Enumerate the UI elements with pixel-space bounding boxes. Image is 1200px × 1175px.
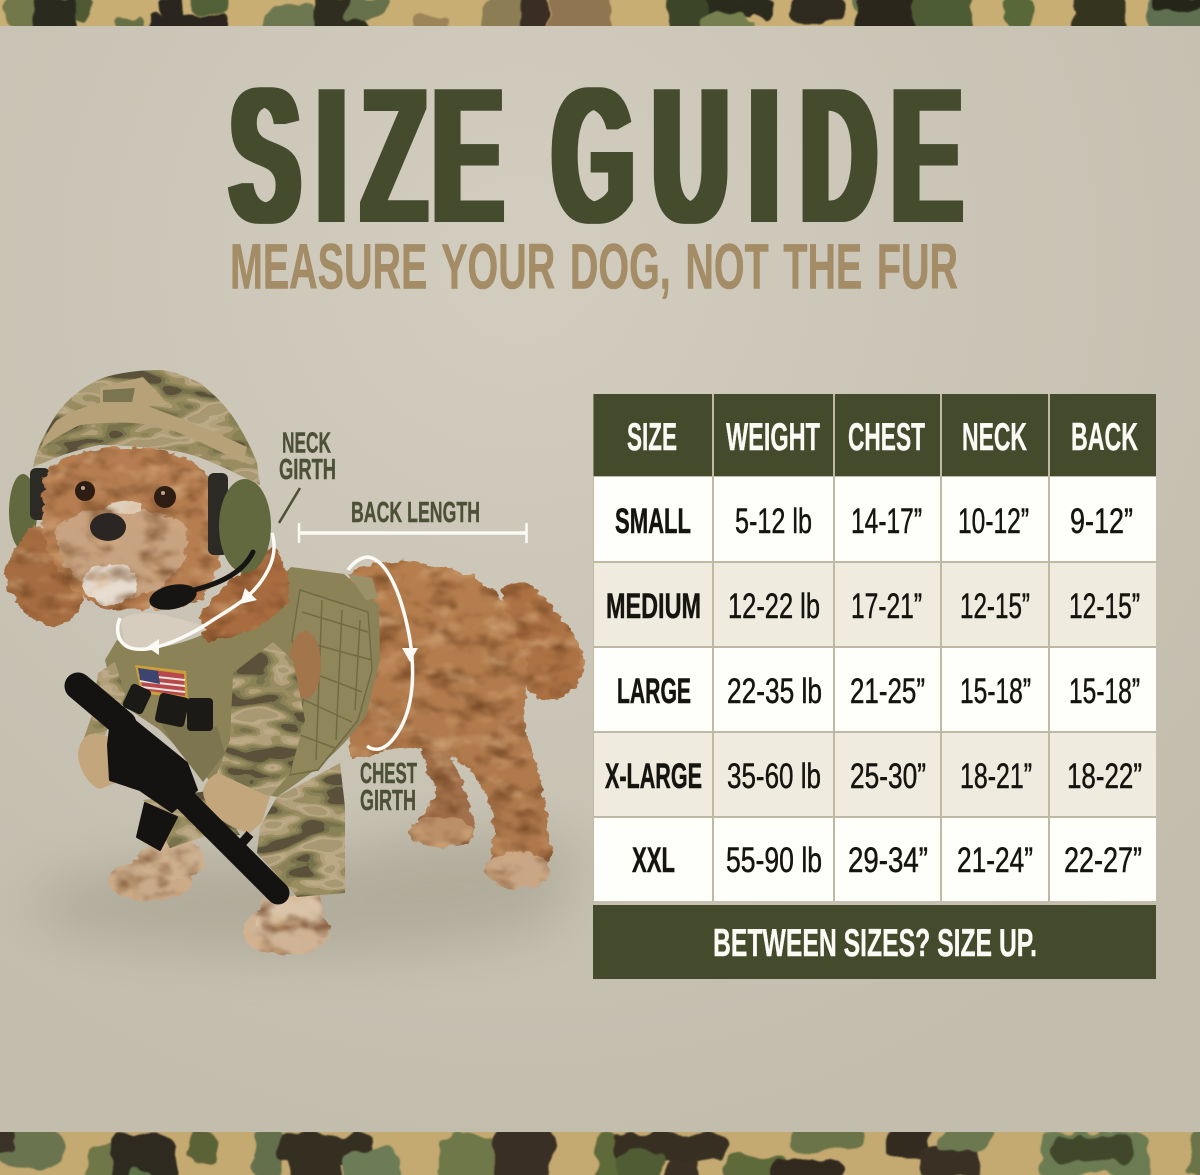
row: x-large: 18-22” — [1067, 757, 1142, 796]
size table — [593, 394, 1156, 979]
tan paw mitts — [78, 734, 270, 833]
row: small: 9-12” — [1070, 502, 1133, 541]
header row: WEIGHT — [726, 416, 820, 459]
label: neck girth — [279, 428, 336, 486]
ground shadow — [30, 832, 590, 955]
row: medium — [594, 563, 1156, 646]
nose — [90, 513, 126, 541]
toy rifle — [78, 686, 278, 893]
measure: chest girth arrow — [348, 557, 418, 749]
label: neck girth: NECK — [282, 428, 331, 460]
camo border: bottom — [0, 1126, 1200, 1175]
left earmuff — [9, 468, 50, 550]
row: medium: 12-15” — [1069, 587, 1140, 626]
header row — [594, 394, 1156, 476]
face fur — [42, 447, 222, 610]
eyes — [75, 481, 176, 508]
row: medium: MEDIUM — [606, 587, 701, 626]
row: xxl: 55-90 lb — [726, 841, 822, 880]
title: SIZE GUIDE — [230, 48, 962, 263]
row: x-large: 25-30” — [850, 757, 926, 796]
row: xxl: 21-24” — [957, 841, 1033, 880]
label: chest girth: GIRTH — [360, 785, 416, 817]
row: x-large — [594, 733, 1156, 816]
row: large: LARGE — [617, 672, 691, 711]
row: large: 15-18” — [960, 672, 1031, 711]
row: small: 10-12” — [958, 502, 1029, 541]
dog head — [4, 370, 271, 627]
row: large: 22-35 lb — [727, 672, 822, 711]
label: back length: BACK LENGTH — [351, 497, 480, 529]
row: x-large: 18-21” — [960, 757, 1032, 796]
measure: back length bar — [298, 523, 527, 543]
helmet — [33, 370, 260, 485]
footer note — [593, 905, 1156, 979]
front leg paws — [108, 840, 331, 955]
header row: CHEST — [848, 416, 925, 459]
flag patch — [135, 665, 188, 699]
table grid backing — [593, 394, 1156, 901]
camo front arm — [84, 662, 125, 738]
magazine pouches — [122, 683, 213, 731]
measure: neck girth arrow — [118, 533, 274, 655]
row: x-large: X-LARGE — [605, 757, 702, 796]
label: chest girth: CHEST — [360, 758, 417, 790]
neck fur and bib — [120, 545, 290, 649]
header row: SIZE — [627, 416, 677, 459]
left ear — [4, 525, 82, 627]
header row: NECK — [962, 416, 1027, 459]
row: medium: 17-21” — [851, 587, 922, 626]
row: xxl — [594, 818, 1156, 901]
row: xxl: 29-34” — [848, 841, 928, 880]
row: small: SMALL — [615, 502, 691, 541]
dog rear: body, legs and tail — [350, 561, 584, 888]
row: xxl: 22-27” — [1064, 841, 1142, 880]
camo border: top — [0, 0, 1200, 39]
row: large: 15-18” — [1069, 672, 1140, 711]
camo sleeve — [217, 642, 305, 797]
dog illustration — [4, 370, 590, 955]
row: small: 14-17” — [851, 502, 922, 541]
header row: BACK — [1071, 416, 1138, 459]
row: medium: 12-15” — [960, 587, 1030, 626]
label: neck girth: GIRTH — [279, 454, 336, 486]
row: small: 5-12 lb — [735, 502, 812, 541]
measure: neck girth leader line — [279, 488, 300, 523]
row: x-large: 35-60 lb — [727, 757, 821, 796]
right earmuff — [208, 473, 271, 573]
row: large: 21-25” — [850, 672, 925, 711]
headset microphone — [147, 552, 253, 614]
label: chest girth — [360, 758, 417, 817]
camo trousers — [143, 763, 345, 897]
row: medium: 12-22 lb — [728, 587, 820, 626]
row: small — [594, 477, 1156, 561]
tactical vest — [105, 567, 380, 797]
row: xxl: XXL — [632, 841, 675, 880]
row: large — [594, 648, 1156, 731]
